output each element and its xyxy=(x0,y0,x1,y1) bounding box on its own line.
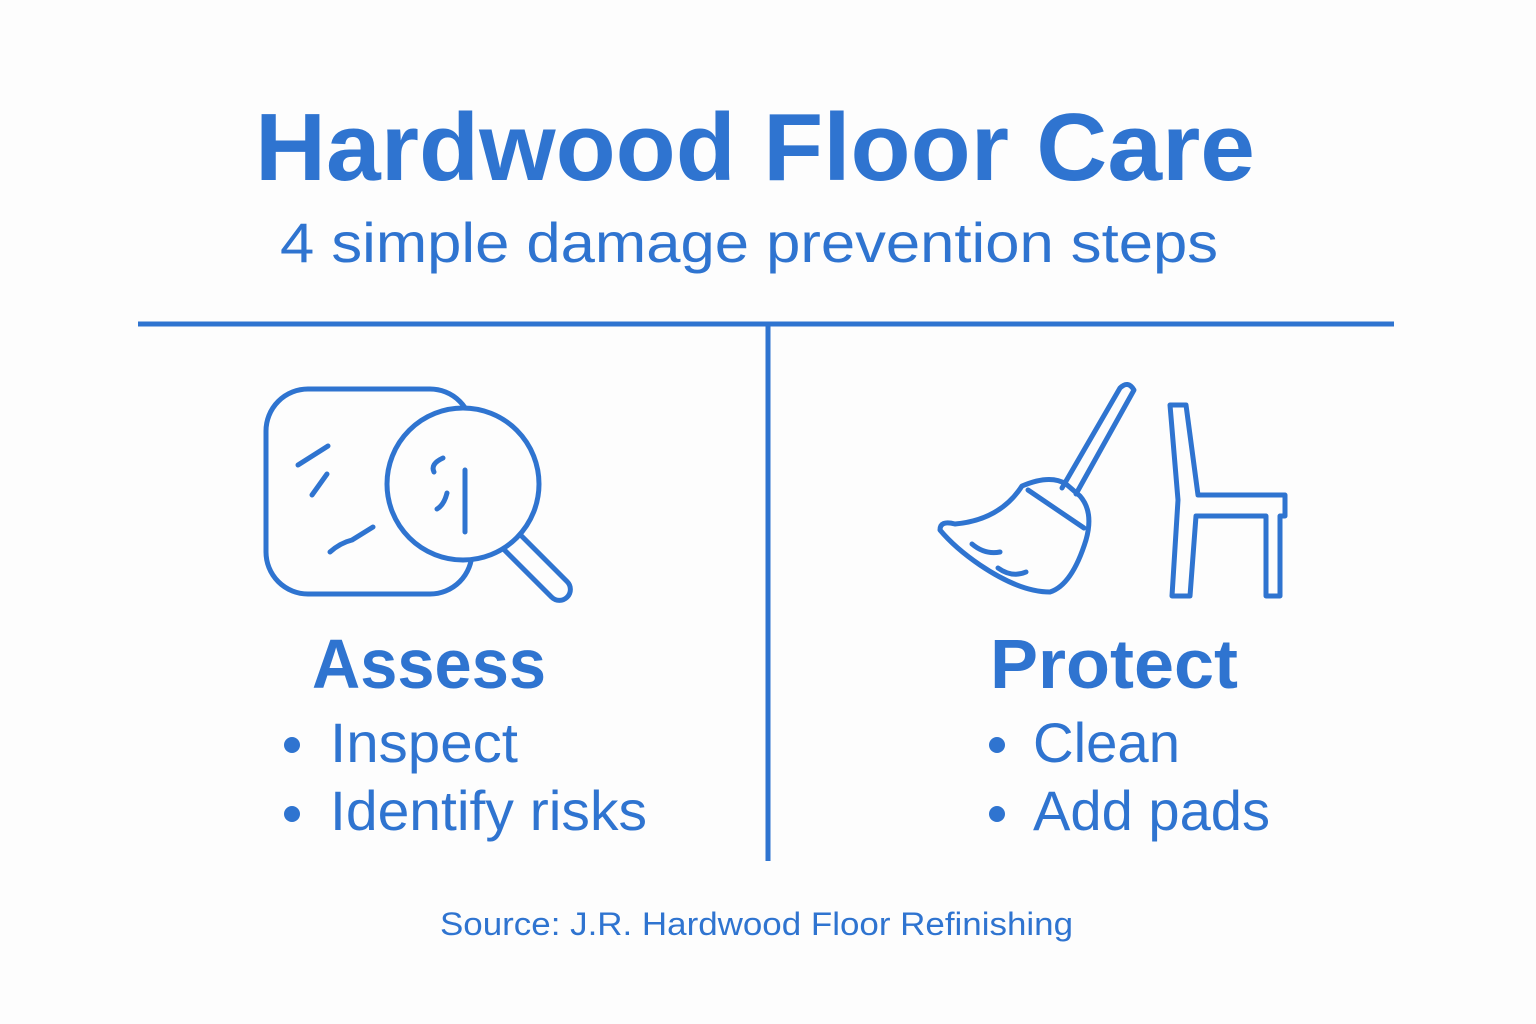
subtitle: 4 simple damage prevention steps xyxy=(280,211,1218,274)
heading: protect: Protect xyxy=(990,625,1238,703)
panel: assess xyxy=(266,389,647,842)
title: Hardwood Floor Care xyxy=(255,94,1255,201)
bullet list: protect: Add pads xyxy=(1033,779,1270,842)
icon: broom xyxy=(940,384,1134,592)
heading: assess: Assess xyxy=(312,625,546,703)
icon: chair xyxy=(1170,405,1285,596)
icon: inspect floor with magnifier xyxy=(266,389,575,605)
bullet list: assess: Identify risks xyxy=(330,779,647,842)
bullet list: protect xyxy=(989,711,1270,842)
bullet list: assess xyxy=(284,711,647,842)
source: Source: J.R. Hardwood Floor Refinishing xyxy=(440,906,1073,942)
panel: protect xyxy=(940,384,1285,842)
bullet list: assess: Inspect xyxy=(330,711,518,774)
bullet list: protect: Clean xyxy=(1033,711,1180,774)
